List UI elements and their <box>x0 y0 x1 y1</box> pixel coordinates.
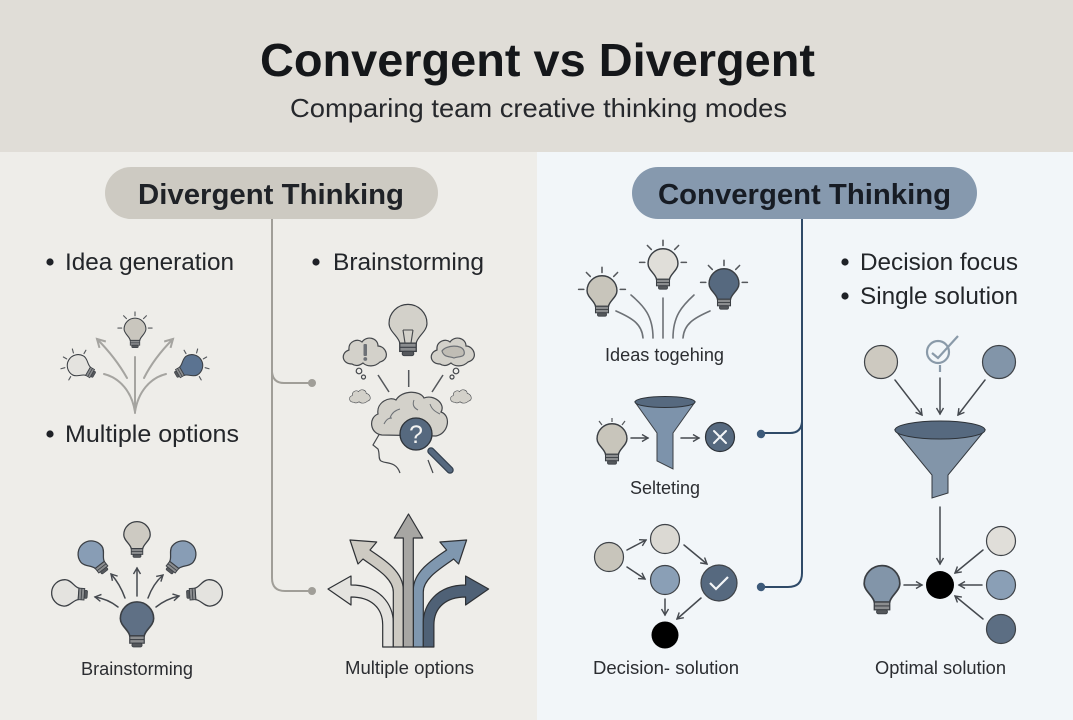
convergent heading pill: Convergent Thinking <box>658 179 951 211</box>
subtitle: Comparing team creative thinking modes <box>290 93 787 123</box>
panel: convergent thinking <box>537 152 1073 720</box>
icon: brainstorming bulbs <box>51 522 223 647</box>
icon: three ideas coming together <box>579 240 747 338</box>
divergent connector lines <box>272 219 316 595</box>
label: optimal solution: Optimal solution <box>875 658 1006 678</box>
title: Convergent vs Divergent <box>260 34 815 86</box>
convergent heading pill <box>632 167 977 219</box>
bullet: idea generation: Idea generation <box>65 249 234 276</box>
bullet: single solution: Single solution <box>860 283 1018 310</box>
icon: multiple option arrows <box>328 514 489 647</box>
convergent connector lines <box>757 219 802 591</box>
icon: optimal solution convergence <box>864 507 1016 644</box>
panel: divergent thinking <box>0 152 537 720</box>
divergent heading pill <box>105 167 438 219</box>
icon: brain with idea clouds: ? <box>409 421 423 449</box>
icon: selecting funnel <box>597 396 734 469</box>
icon: brain with idea clouds <box>343 304 474 473</box>
icon: large funnel with inputs <box>864 336 1016 498</box>
divergent heading pill: Divergent Thinking <box>138 179 404 211</box>
label: multiple options: Multiple options <box>345 658 474 678</box>
label: selecting: Selteting <box>630 478 700 498</box>
panel: header <box>0 0 1073 152</box>
bullet: brainstorming: Brainstorming <box>333 249 484 276</box>
bullet: multiple options: Multiple options <box>65 421 239 448</box>
bullet: decision focus: Decision focus <box>860 249 1018 276</box>
icon: decision flow <box>594 524 737 648</box>
label: decision solution: Decision- solution <box>593 658 739 678</box>
label: brainstorming: Brainstorming <box>81 659 193 679</box>
label: ideas together: Ideas togehing <box>605 345 724 365</box>
icon: ideas spreading from a stem <box>55 312 215 413</box>
